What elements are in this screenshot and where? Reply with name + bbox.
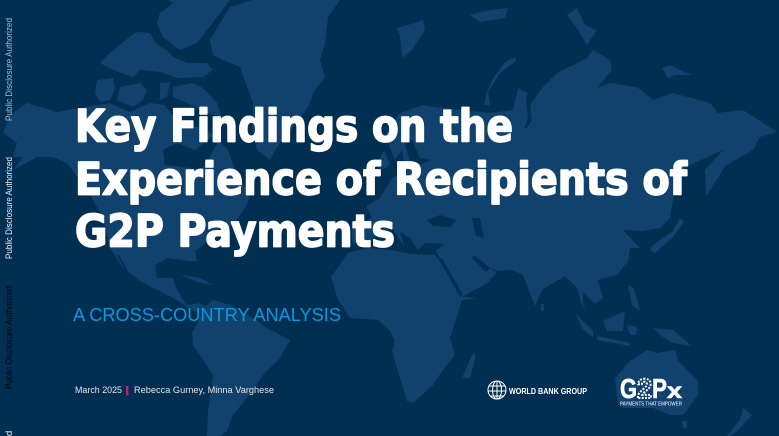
date and authors line: March 2025 xyxy=(75,385,122,395)
date and authors line: Rebecca Gurney, Minna Varghese xyxy=(134,385,274,395)
Red Sea xyxy=(438,258,463,297)
dotted 2: 2 xyxy=(637,373,652,404)
title: Experience of Recipients of xyxy=(75,154,688,206)
Persian Gulf xyxy=(471,256,490,272)
Hudson Bay xyxy=(163,137,218,170)
Africa xyxy=(331,248,477,403)
sidebar disclosure stamps: d xyxy=(4,431,15,436)
logo: World Bank Group: WORLD BANK GROUP xyxy=(509,386,587,396)
sidebar disclosure stamps xyxy=(4,18,15,436)
Gulf of California xyxy=(117,255,129,274)
Islands xyxy=(180,8,752,436)
South America xyxy=(192,300,290,436)
Baltic Sea xyxy=(405,140,432,165)
Greenland xyxy=(210,0,340,160)
seas and inland waters xyxy=(117,95,532,297)
logo: G2Px: G xyxy=(620,373,637,404)
Gulf of Ob xyxy=(524,95,532,128)
sidebar disclosure stamps: Public Disclosure Authorized xyxy=(4,18,15,121)
title xyxy=(75,102,688,258)
Eurasia xyxy=(352,50,777,321)
logo: G2Px: PAYMENTS THAT EMPOWER xyxy=(620,402,682,408)
logo: World Bank Group xyxy=(488,381,587,399)
subtitle: A CROSS-COUNTRY ANALYSIS xyxy=(73,304,341,325)
Arctic Canada islands xyxy=(95,0,230,117)
logo: G2Px: x xyxy=(667,380,682,403)
North America xyxy=(3,103,250,312)
date and authors line xyxy=(75,385,274,396)
Australia xyxy=(615,350,698,415)
Caspian Sea xyxy=(472,218,484,238)
title: Key Findings on the xyxy=(75,102,513,152)
sidebar disclosure stamps: Public Disclosure Authorized xyxy=(4,157,15,259)
divider bar xyxy=(126,386,128,396)
title: G2P Payments xyxy=(75,206,395,258)
logo: G2Px xyxy=(620,373,682,408)
sidebar disclosure stamps: Public Disclosure Authorized xyxy=(4,286,15,389)
Black Sea xyxy=(427,215,457,227)
icon: globe xyxy=(488,381,506,399)
logo: G2Px: P xyxy=(652,373,667,404)
Gulf of St Lawrence channel xyxy=(205,115,222,135)
